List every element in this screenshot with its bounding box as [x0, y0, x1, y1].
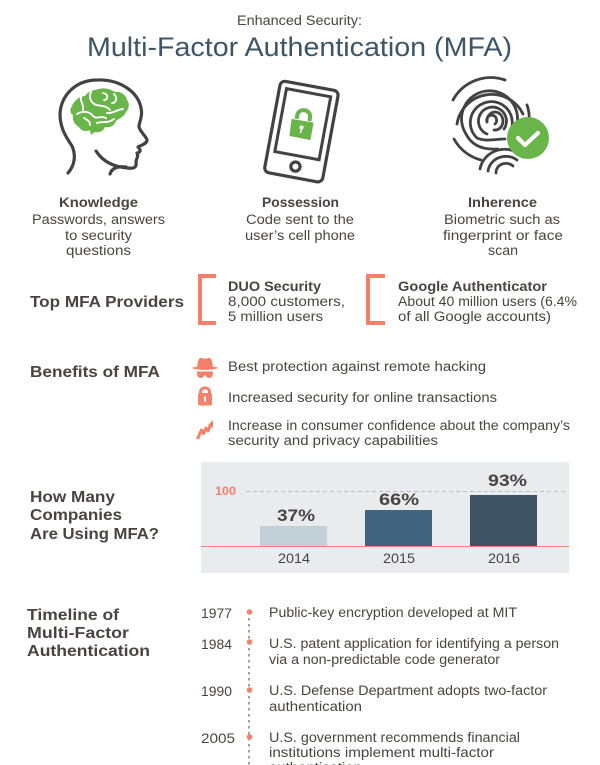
heading: inherence: Inherence — [468, 195, 538, 210]
icon: head with brain — [60, 80, 147, 174]
icon: rising graph — [198, 420, 213, 439]
panel: benefits list — [192, 358, 570, 448]
title: Enhanced Security: — [237, 13, 362, 28]
title: Multi-Factor Authentication (MFA) — [87, 32, 512, 62]
panel: DUO Security: 8,000 customers, — [228, 294, 345, 309]
timeline: 1977 — [201, 606, 232, 621]
timeline: Public-key encryption developed at MIT — [269, 605, 517, 620]
benefit text: Best protection against remote hacking — [228, 359, 486, 374]
bar chart: 37% — [277, 506, 315, 525]
panel: inherence — [443, 78, 563, 258]
bar chart: 2016 — [488, 551, 520, 566]
description: possession: Code sent to the — [246, 212, 354, 227]
timeline: 1990 — [201, 684, 232, 699]
panel: Google Authenticator: Google Authenticator — [398, 279, 548, 294]
heading: timeline: Authentication — [27, 643, 150, 660]
description: inherence: fingerprint or face — [443, 228, 563, 243]
benefit text — [228, 418, 570, 448]
timeline: U.S. Defense Department adopts two-factor — [269, 683, 548, 698]
timeline: authentication — [269, 699, 362, 714]
heading: timeline: Multi-Factor — [27, 625, 129, 642]
bar chart — [201, 462, 569, 573]
timeline: 2005 — [201, 731, 235, 746]
panel: DUO Security: DUO Security — [228, 279, 322, 294]
icon: phone with lock — [264, 80, 339, 183]
bar chart: 66% — [379, 490, 419, 509]
timeline — [201, 605, 559, 765]
description: knowledge — [32, 212, 165, 258]
bar chart: 93% — [488, 471, 527, 490]
panel: DUO Security — [200, 276, 345, 324]
timeline: 1984 — [201, 637, 232, 652]
icon: fingerprint with check — [453, 78, 549, 173]
bar chart: 2014 — [278, 551, 311, 566]
heading: top MFA providers: Top MFA Providers — [30, 294, 184, 311]
heading: how many companies: Are Using MFA? — [30, 526, 159, 543]
heading: knowledge: Knowledge — [59, 195, 139, 210]
bar chart: 2015 — [383, 551, 415, 566]
icon: lock — [198, 388, 212, 406]
heading: how many companies: How Many — [30, 489, 115, 506]
description: knowledge: questions — [66, 243, 131, 258]
benefit text: security and privacy capabilities — [228, 433, 438, 448]
timeline: U.S. patent application for identifying a person — [269, 636, 559, 651]
bracket — [200, 276, 216, 323]
heading: timeline — [27, 607, 150, 660]
heading: possession: Possession — [262, 195, 339, 210]
heading: timeline: Timeline of — [27, 607, 120, 624]
description: possession — [245, 212, 355, 243]
bracket — [368, 276, 385, 323]
timeline: institutions implement multi-factor — [269, 745, 495, 760]
panel: DUO Security: 5 million users — [228, 309, 323, 324]
timeline: via a non-predictable code generator — [269, 652, 501, 667]
panel: knowledge — [32, 80, 165, 258]
title — [87, 13, 512, 62]
panel: Google Authenticator: of all Google accounts) — [398, 309, 551, 324]
description: knowledge: to security — [65, 228, 132, 243]
icon: hacker hat — [192, 358, 218, 378]
heading: how many companies: Companies — [30, 507, 122, 524]
description: knowledge: Passwords, answers — [32, 212, 165, 227]
description: inherence: Biometric such as — [444, 212, 560, 227]
description: possession: user’s cell phone — [245, 228, 355, 243]
benefit text: Increase in consumer confidence about the company’s — [228, 418, 570, 433]
description: inherence: scan — [488, 243, 518, 258]
heading: benefits of MFA: Benefits of MFA — [30, 364, 160, 381]
panel: Google Authenticator — [368, 276, 577, 324]
timeline: U.S. government recommends financial — [269, 730, 520, 745]
panel: Google Authenticator: About 40 million users (6.4% — [398, 294, 577, 309]
bar chart: 100 — [215, 484, 236, 498]
benefit text: Increased security for online transactions — [228, 390, 497, 405]
heading: how many companies — [30, 489, 159, 543]
panel: possession — [245, 80, 355, 243]
description: inherence — [443, 212, 563, 258]
